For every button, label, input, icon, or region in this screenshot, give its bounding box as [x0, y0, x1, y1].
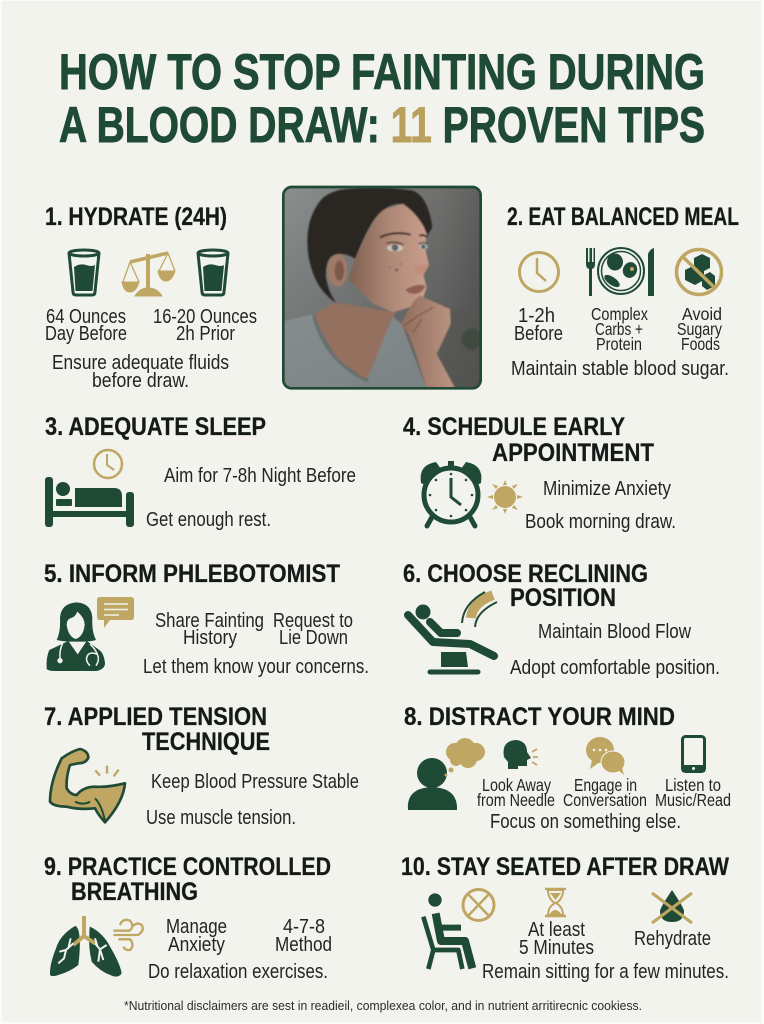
label: 4-7-8 method — [275, 916, 332, 956]
icon: flexed arm — [50, 749, 125, 822]
icon: speech bubble — [97, 597, 134, 628]
heading: tip 4 — [403, 413, 654, 467]
title: A BLOOD DRAW: 11 PROVEN TIPS — [59, 97, 705, 153]
label: listen to music or read: Music/Read — [655, 790, 731, 810]
label: look away from needle: Look Away — [482, 775, 551, 795]
summary: tip 2: Maintain stable blood sugar. — [511, 358, 729, 380]
icon: breath wind lines — [113, 920, 143, 950]
icon: no sugar cubes — [676, 250, 722, 294]
heading: tip 5: 5. INFORM PHLEBOTOMIST — [44, 560, 340, 588]
label: 16-20 ounces 2h prior: 2h Prior — [176, 323, 235, 345]
icon: water drop with X — [652, 890, 692, 923]
label: 64 ounces day before: 64 Ounces — [46, 306, 126, 328]
label: share fainting history — [155, 610, 264, 649]
icon: lungs — [50, 916, 122, 977]
label: avoid sugary foods — [677, 304, 722, 354]
label: at least 5 minutes: 5 Minutes — [519, 937, 594, 959]
panel: tip 8 distract your mind — [404, 703, 731, 833]
label: avoid sugary foods: Foods — [681, 334, 720, 354]
label: request to lie down: Lie Down — [279, 627, 348, 649]
label: 16-20 ounces 2h prior — [153, 306, 257, 345]
heading: tip 7: 7. APPLIED TENSION — [44, 703, 267, 731]
summary: tip 10: Remain sitting for a few minutes. — [482, 961, 729, 983]
panel: tip 7 applied tension — [44, 703, 359, 829]
icon: doctor with stethoscope — [47, 602, 105, 671]
icon: head looking away — [504, 740, 538, 769]
label: share fainting history: Share Fainting — [155, 610, 264, 632]
label: complex carbs + protein: Complex — [591, 304, 648, 324]
heading: tip 4: APPOINTMENT — [492, 439, 654, 467]
label: engage in conversation: Conversation — [563, 790, 647, 810]
heading: tip 9: 9. PRACTICE CONTROLLED — [44, 853, 331, 881]
portrait photo: worried woman — [283, 187, 482, 389]
summary: tip 9: Do relaxation exercises. — [148, 961, 328, 983]
label: listen to music or read — [655, 775, 731, 810]
icon: blood vessel — [462, 592, 497, 627]
label: 1-2h before — [514, 305, 563, 345]
summary: tip 4: Book morning draw. — [525, 511, 676, 533]
label: rehydrate: Rehydrate — [634, 928, 711, 950]
heading: tip 6: POSITION — [510, 584, 616, 612]
icon: sun — [487, 480, 523, 514]
panel: tip 4 schedule early — [403, 413, 676, 533]
label: avoid sugary foods: Avoid — [682, 304, 722, 324]
heading: tip 9: BREATHING — [71, 878, 198, 906]
summary: tip 5: Let them know your concerns. — [143, 656, 369, 678]
label: request to lie down: Request to — [273, 610, 353, 632]
summary: tip 3: Get enough rest. — [146, 509, 271, 531]
heading: tip 9 — [44, 853, 331, 906]
title — [59, 44, 705, 153]
label: complex carbs + protein: Carbs + — [595, 319, 643, 339]
summary: tip 7: Use muscle tension. — [146, 807, 296, 829]
icon: plate with fork and knife — [586, 248, 654, 296]
label: 1-2h before: Before — [514, 323, 563, 345]
panel: tip 1 hydrate — [45, 203, 257, 392]
text: keep blood pressure stable: Keep Blood Pressure Stable — [151, 771, 359, 793]
summary: tip 1: Ensure adequate fluids — [52, 352, 229, 374]
icon: person in bed — [45, 477, 134, 527]
label: look away from needle — [477, 775, 555, 810]
label: 64 ounces day before: Day Before — [45, 323, 127, 345]
icon: phone — [682, 736, 705, 772]
label: 16-20 ounces 2h prior: 16-20 Ounces — [153, 306, 257, 328]
text: aim for 7-8h: Aim for 7-8h Night Before — [164, 465, 356, 487]
icon: conversation bubbles — [586, 737, 625, 775]
summary: tip 1 — [52, 352, 229, 392]
summary: tip 1: before draw. — [92, 370, 189, 392]
heading: tip 4: 4. SCHEDULE EARLY — [403, 413, 625, 441]
icon: reclining chair — [408, 604, 494, 672]
panel: tip 10 stay seated — [401, 853, 729, 983]
summary: tip 8: Focus on something else. — [490, 811, 681, 833]
label: complex carbs + protein — [591, 304, 648, 354]
label: 4-7-8 method: 4-7-8 — [283, 916, 325, 938]
label: request to lie down — [273, 610, 353, 649]
heading: tip 7: TECHNIQUE — [142, 728, 270, 756]
panel: tip 2 balanced meal — [507, 203, 739, 380]
icon: hourglass — [545, 889, 566, 916]
panel: tip 5 inform phlebotomist — [44, 560, 369, 678]
label: at least 5 minutes — [519, 919, 594, 959]
label: 4-7-8 method: Method — [275, 934, 332, 956]
panel: tip 6 reclining position — [403, 560, 720, 679]
icon: crossed circle — [463, 890, 494, 920]
label: avoid sugary foods: Sugary — [677, 319, 722, 339]
icon: gold clock above bed — [94, 450, 122, 478]
heading: tip 6 — [403, 560, 648, 612]
icon: alarm clock — [421, 461, 481, 526]
label: listen to music or read: Listen to — [665, 775, 721, 795]
label: engage in conversation — [563, 775, 647, 810]
summary: tip 6: Adopt comfortable position. — [510, 657, 720, 679]
icon: balance scale — [122, 253, 175, 296]
panel: tip 3 adequate sleep — [45, 413, 356, 531]
label: manage anxiety — [166, 916, 227, 956]
heading: tip 3: 3. ADEQUATE SLEEP — [45, 413, 266, 441]
label: 64 ounces day before — [45, 306, 127, 345]
icon: water glass right — [198, 250, 228, 295]
heading: tip 1: 1. HYDRATE (24H) — [45, 203, 227, 231]
footer disclaimer: *Nutritional disclaimers are sest in readieil, complexea color, and in nutrient arritirecnic cookiess. — [124, 998, 642, 1013]
label: manage anxiety: Manage — [166, 916, 227, 938]
heading: tip 8: 8. DISTRACT YOUR MIND — [404, 703, 675, 731]
text: maintain blood flow: Maintain Blood Flow — [538, 621, 691, 643]
panel: tip 9 controlled breathing — [44, 853, 332, 983]
heading: tip 6: 6. CHOOSE RECLINING — [403, 560, 648, 588]
label: engage in conversation: Engage in — [574, 775, 637, 795]
label: at least 5 minutes: At least — [528, 919, 585, 941]
text: minimize anxiety: Minimize Anxiety — [543, 478, 671, 500]
icon: gold clock — [520, 252, 558, 292]
label: look away from needle: from Needle — [477, 790, 555, 810]
icon: seated person — [423, 893, 472, 969]
heading: tip 7 — [44, 703, 270, 756]
icon: water glass left — [69, 250, 99, 295]
icon: person with thought cloud — [408, 738, 485, 810]
label: manage anxiety: Anxiety — [168, 934, 225, 956]
label: complex carbs + protein: Protein — [596, 334, 642, 354]
label: share fainting history: History — [183, 627, 237, 649]
label: 1-2h before: 1-2h — [518, 305, 555, 327]
